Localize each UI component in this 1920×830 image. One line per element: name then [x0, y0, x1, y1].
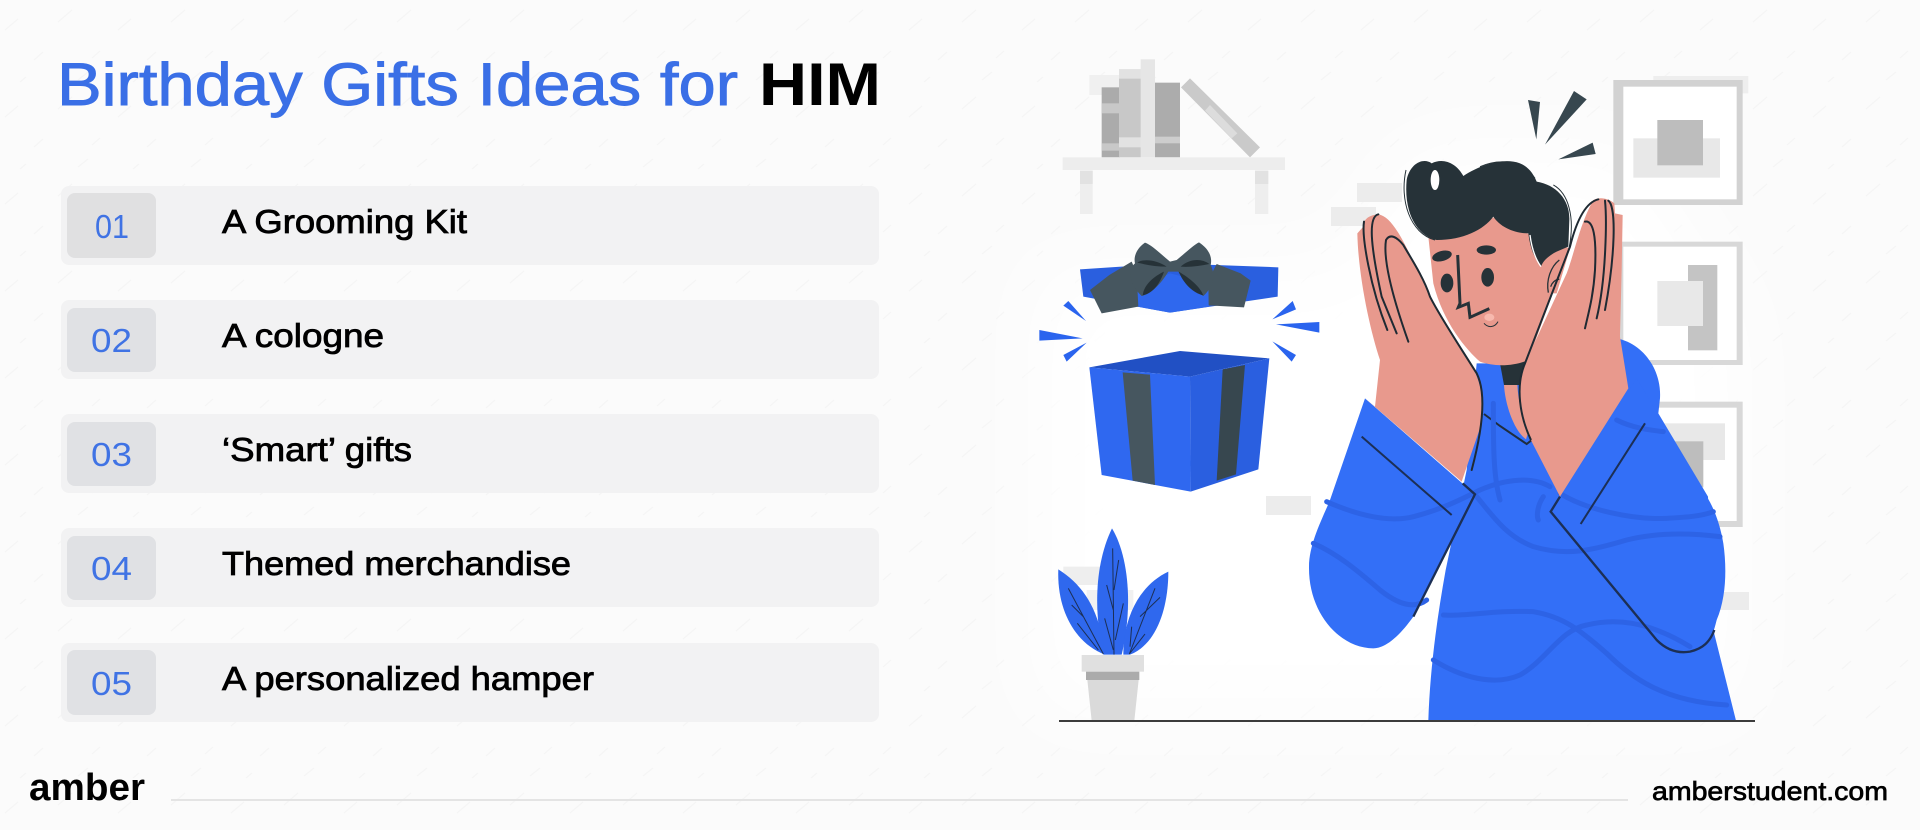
decorative wall blocks	[1266, 183, 1749, 610]
list item 04	[61, 528, 879, 607]
icon: wall picture frames	[1613, 76, 1748, 527]
footer logo: amber: amber	[29, 767, 145, 809]
icon: potted plant	[1058, 528, 1168, 721]
gift bow	[1090, 242, 1251, 313]
list item 03: ‘Smart’ gifts	[222, 431, 412, 468]
list item 02	[61, 300, 879, 379]
shirt folds	[1313, 403, 1727, 705]
face	[1428, 217, 1568, 365]
right sleeve	[1551, 378, 1725, 652]
footer website: amberstudent.com	[1652, 776, 1888, 806]
ear	[1542, 247, 1570, 293]
list item 05: A personalized hamper	[222, 660, 594, 697]
list item 01	[61, 186, 879, 265]
left hand	[1357, 214, 1483, 482]
surprise marks	[1528, 91, 1596, 159]
gift box body	[1089, 351, 1269, 492]
sparkles around gift	[1039, 301, 1319, 362]
frame 1	[1613, 76, 1748, 205]
neck	[1500, 357, 1528, 385]
gift lid	[1080, 263, 1278, 313]
list item 01: 01	[95, 208, 129, 245]
right hand	[1519, 198, 1628, 497]
icon: bookshelf with books	[1063, 59, 1285, 214]
list item 03	[61, 414, 879, 493]
gift list	[61, 186, 879, 722]
list item 05	[61, 643, 879, 722]
list item 04: 04	[91, 550, 132, 587]
title: HIM	[759, 51, 881, 118]
icon: surprised man	[1309, 91, 1736, 721]
torso	[1428, 338, 1736, 721]
left sleeve	[1309, 398, 1475, 648]
list item 02: 02	[91, 322, 132, 359]
list item 03: 03	[91, 436, 132, 473]
list item 04: Themed merchandise	[222, 545, 571, 582]
list item 02: A cologne	[222, 317, 384, 354]
facial features	[1431, 245, 1496, 292]
icon: open gift box	[1039, 242, 1319, 492]
list item 05: 05	[91, 665, 132, 702]
title: Birthday Gifts Ideas for	[57, 51, 738, 118]
frame 3	[1647, 402, 1743, 527]
list item 01: A Grooming Kit	[222, 203, 467, 240]
hair	[1406, 161, 1569, 267]
ground line	[1059, 720, 1755, 722]
frame 2	[1617, 242, 1743, 365]
sleeve edge lines	[1362, 423, 1714, 652]
